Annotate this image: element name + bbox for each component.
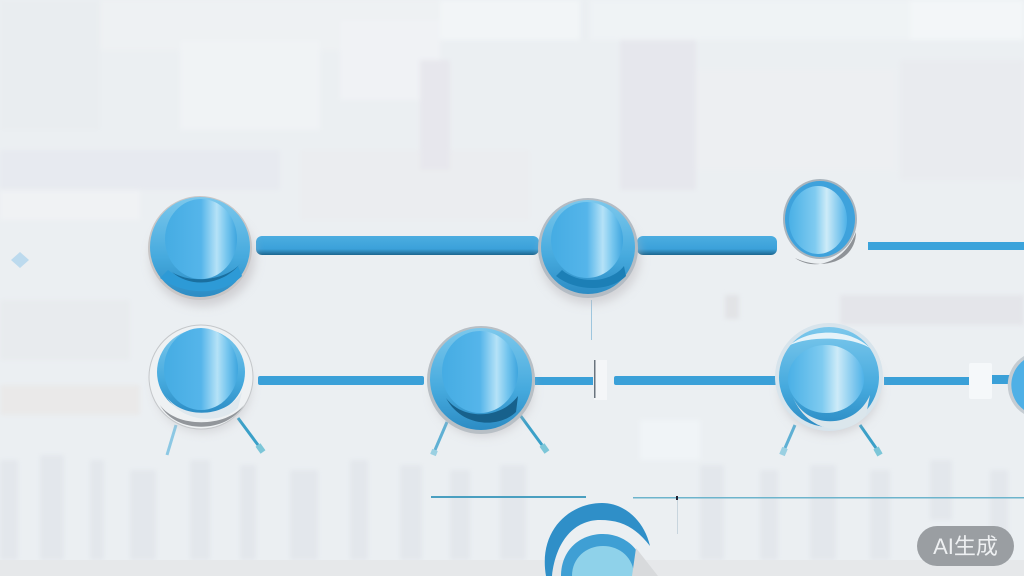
connector: white clip on lower bar bbox=[594, 360, 607, 400]
badge: AI generated: AI生成 bbox=[933, 534, 998, 559]
connector: white block on lower bar bbox=[969, 363, 992, 399]
thin lines above bottom node bbox=[431, 496, 1024, 534]
badge: AI generated bbox=[917, 526, 1014, 566]
icon: small diamond at left bbox=[11, 252, 29, 268]
node: top row 1 bbox=[148, 196, 255, 306]
faint vertical stripes in the lower area bbox=[0, 455, 1008, 560]
thin vertical line under node bbox=[591, 300, 592, 340]
node: top row 3 bbox=[783, 179, 857, 264]
legs bbox=[782, 425, 880, 455]
legs bbox=[433, 415, 547, 455]
node: lower row 3 bbox=[775, 323, 883, 455]
legs bbox=[167, 418, 263, 455]
lower row connector bars bbox=[258, 375, 1012, 385]
top row connector bars bbox=[256, 236, 1024, 255]
node: bottom, cut off at lower edge bbox=[545, 503, 658, 576]
node: lower row 4, cut off at right edge bbox=[1008, 356, 1024, 414]
node: top row 2 bbox=[538, 198, 640, 304]
node: lower row 2 bbox=[427, 326, 547, 455]
node: lower row 1 bbox=[149, 325, 263, 455]
